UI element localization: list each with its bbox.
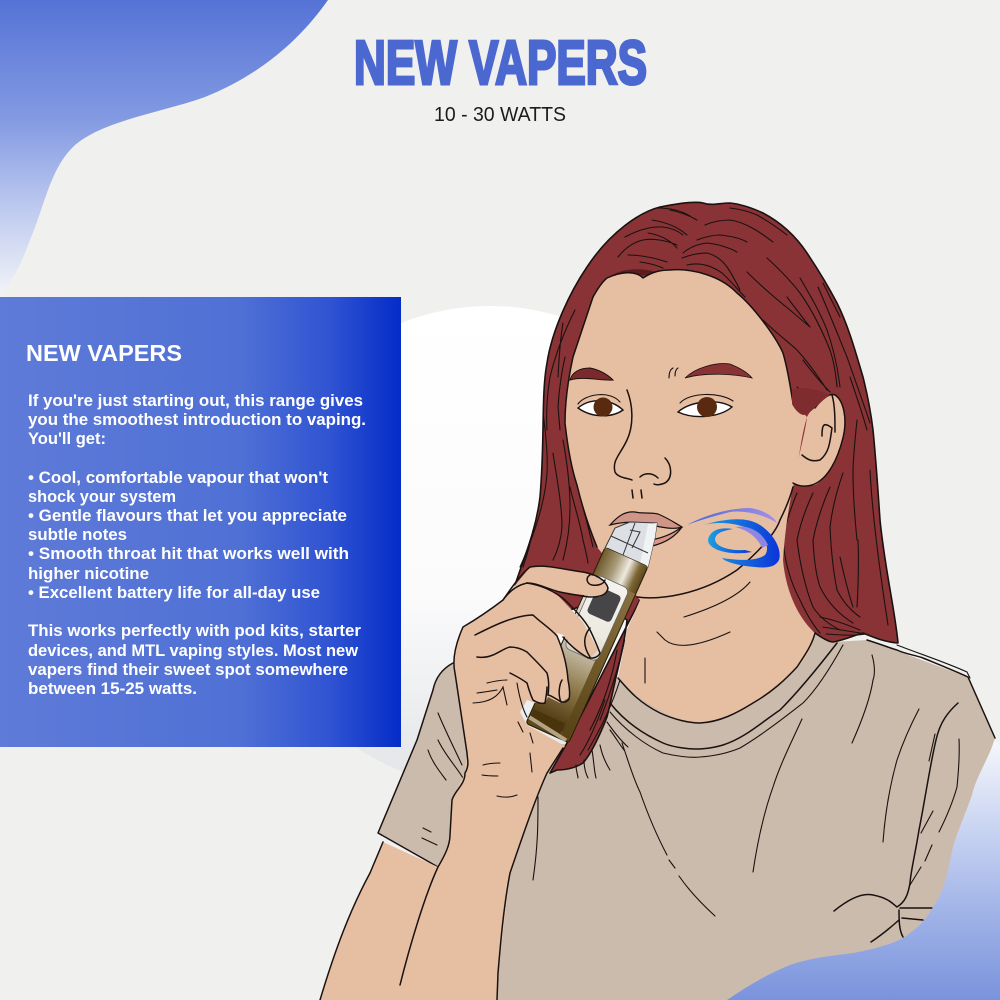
closing paragraph: vapers find their sweet spot somewhere: [28, 661, 348, 679]
panel: new vapers description: [0, 297, 401, 747]
intro paragraph: [28, 392, 366, 448]
lips: [610, 512, 682, 546]
bullet list: higher nicotine: [28, 565, 149, 583]
collar lower line: [610, 645, 843, 757]
eyebrows: [570, 364, 752, 380]
closing paragraph: between 15-25 watts.: [28, 680, 197, 698]
left eye: [578, 395, 623, 416]
vapour swirl: [687, 508, 780, 567]
intro paragraph: If you're just starting out, this range gives: [28, 392, 363, 410]
subtitle: wattage range: 10 - 30 WATTS: [434, 104, 566, 126]
ring finger: [477, 647, 549, 703]
collar: [610, 643, 837, 749]
bottom-right blue wave: [727, 740, 1000, 1000]
thumb: [503, 572, 608, 600]
right eye: [678, 394, 733, 417]
t-shirt: [497, 633, 995, 1000]
sleeve: [378, 663, 467, 867]
ear: [792, 388, 845, 486]
hair: [515, 202, 898, 778]
panel heading: NEW VAPERS: [26, 340, 182, 366]
closing paragraph: devices, and MTL vaping styles. Most new: [28, 642, 358, 660]
closing paragraph: [28, 622, 362, 698]
index finger: [527, 583, 600, 658]
vape device: [526, 522, 657, 743]
closing paragraph: This works perfectly with pod kits, starter: [28, 622, 362, 640]
bullet list: shock your system: [28, 488, 176, 506]
title: NEW VAPERS: [354, 29, 647, 98]
mouthpiece: [605, 522, 657, 567]
top-left blue wave: [0, 0, 328, 297]
illustration: person vaping: [320, 202, 995, 1000]
bullet list: • Cool, comfortable vapour that won't: [28, 469, 329, 487]
middle finger: [475, 615, 570, 702]
bullet list: subtle notes: [28, 526, 127, 544]
bullet list: • Excellent battery life for all-day use: [28, 584, 320, 602]
neck and face: [565, 270, 845, 757]
panel background: [0, 297, 401, 747]
bullet list: • Smooth throat hit that works well with: [28, 545, 349, 563]
hand and forearm: [320, 566, 608, 1000]
white circle backdrop: [249, 306, 731, 788]
screen: [564, 574, 630, 662]
bullet list: • Gentle flavours that let you appreciate: [28, 507, 347, 525]
bullet list: [28, 469, 349, 602]
nose: [614, 390, 671, 498]
vape body: [526, 547, 648, 743]
intro paragraph: You'll get:: [28, 430, 106, 448]
intro paragraph: you the smoothest introduction to vaping.: [28, 411, 366, 429]
